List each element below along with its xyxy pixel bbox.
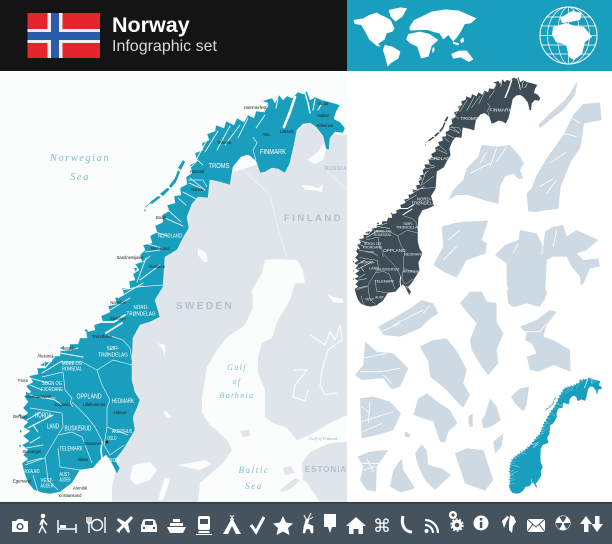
icon: up and down arrows xyxy=(580,516,603,532)
icon: ship xyxy=(167,519,186,533)
city labels: Florø xyxy=(18,378,28,383)
city labels: Bodø xyxy=(156,215,166,220)
map: dark Norway with regions: TROMS xyxy=(460,116,479,122)
icon: camera xyxy=(12,519,28,532)
map: dark Norway with regions: MØRE OG xyxy=(374,230,392,234)
map: dark Norway with regions: TRØNDELAG xyxy=(412,201,439,206)
map: dark Norway with regions: SØR- xyxy=(403,221,414,226)
city labels: Ålesund xyxy=(37,354,53,358)
map: dark Norway with regions xyxy=(352,77,540,307)
city labels: Hammerfest xyxy=(244,105,267,110)
city labels: Bergen xyxy=(13,414,27,419)
icon: telephone xyxy=(402,516,412,532)
region boundaries xyxy=(25,137,257,492)
header: world map panel xyxy=(347,0,612,71)
icon: home xyxy=(346,517,366,534)
sea labels: Norwegian xyxy=(49,153,110,164)
region labels: AKERSHUS xyxy=(112,429,132,435)
region labels: OPPLAND xyxy=(76,394,102,400)
panel: main map background xyxy=(0,71,347,503)
neighbouring land xyxy=(112,122,347,502)
city labels: Stavanger xyxy=(22,449,42,454)
icon: tent xyxy=(223,515,241,534)
map: Norway main shape xyxy=(18,91,345,494)
region labels: SØR- xyxy=(106,346,120,352)
icon: plate and cutlery xyxy=(87,517,105,533)
city labels: Kirkenes xyxy=(317,123,333,128)
sea labels: Bothnia xyxy=(219,391,255,400)
region labels: SOGN OG xyxy=(42,381,62,387)
icon: radiation xyxy=(556,516,570,530)
city labels: Skien xyxy=(78,457,89,462)
region labels: VEST- xyxy=(40,478,54,484)
city labels: Trondheim xyxy=(92,334,112,339)
map: dark Norway with regions: VEST- xyxy=(365,297,375,301)
region labels: AUST- xyxy=(60,472,71,478)
islands: Lofoten chain xyxy=(134,160,185,272)
city labels: Harstad xyxy=(190,169,205,174)
city labels: Hermansverk xyxy=(27,394,52,399)
subtitle: Infographic set xyxy=(112,38,218,55)
sea labels: Sea xyxy=(245,481,263,491)
region labels: TRØNDELAG xyxy=(98,352,128,358)
region labels: HORDA- xyxy=(35,412,53,420)
map: dark Norway with regions: OPPLAND xyxy=(383,248,406,253)
icon: car xyxy=(141,519,157,532)
icon: globe xyxy=(502,515,516,533)
icon: checkmark xyxy=(251,517,264,532)
region labels: NORD- xyxy=(134,305,149,311)
icon: Norwegian flag xyxy=(28,13,100,58)
icon: gears xyxy=(450,512,463,531)
city labels xyxy=(13,101,333,498)
icon: bed xyxy=(58,520,76,533)
title: Norway xyxy=(112,13,190,37)
map: dark Norway with regions: NORD- xyxy=(417,197,432,202)
icon: speech marker xyxy=(324,514,336,533)
map: dark Norway with regions: HORDA- xyxy=(360,260,376,264)
country labels: ESTONIA xyxy=(305,465,347,474)
map: dark Norway with regions: ØSTFOLD xyxy=(400,285,417,289)
map: dark Norway with regions: AKERSHUS xyxy=(403,270,422,274)
sea labels: Baltic xyxy=(238,465,270,475)
icon: star xyxy=(273,516,293,535)
world map xyxy=(353,7,477,67)
city labels: Lillehammer xyxy=(83,402,106,407)
region labels: OSLO xyxy=(108,436,117,442)
panel: right regions xyxy=(352,77,602,494)
icon: command key: ⌘ xyxy=(373,516,391,537)
region labels xyxy=(24,147,286,490)
country labels: RUSSIA xyxy=(325,166,347,172)
header: title panel xyxy=(0,0,347,71)
icon: plane xyxy=(116,516,133,533)
county silhouettes: upper group xyxy=(433,81,602,307)
icon: train xyxy=(196,516,212,535)
sea labels: Gulf of Finland xyxy=(309,436,338,441)
region labels: AGDER xyxy=(60,478,71,484)
region labels: FINMARK xyxy=(260,147,286,156)
city labels: Tromsø xyxy=(217,140,232,145)
map: dark Norway with regions: ROMSDAL xyxy=(374,233,392,237)
region labels: BUSKERUD xyxy=(64,426,92,432)
icon: walker xyxy=(39,514,47,533)
country labels: SWEDEN xyxy=(176,301,234,312)
region labels: MØRE OG xyxy=(62,361,82,367)
sea labels: of xyxy=(232,377,242,386)
city labels: Kristiansand xyxy=(58,493,82,498)
region labels: ØSTFOLD xyxy=(104,458,120,464)
region labels: TROMS xyxy=(208,161,230,170)
city labels: Molde xyxy=(64,346,76,351)
islands: west coast xyxy=(18,329,88,448)
city labels: Lakselv xyxy=(280,129,295,134)
map: small blue Norway xyxy=(508,377,602,494)
region labels: ROMSDAL xyxy=(62,366,82,372)
region labels: FJORDANE xyxy=(41,387,63,393)
globe xyxy=(540,7,597,64)
city labels: Narvik xyxy=(191,187,204,192)
city labels: Steinkjer xyxy=(110,316,127,321)
map: dark Norway with regions: SOGN OG xyxy=(364,242,382,246)
region labels: NORDLAND xyxy=(158,234,182,240)
city labels: Hamar xyxy=(114,410,127,415)
fjords xyxy=(26,93,322,468)
icon: envelope xyxy=(527,519,545,532)
sea labels: Sea xyxy=(70,172,90,183)
map: dark Norway with regions: FINMARK xyxy=(489,108,513,114)
city labels: Arendal xyxy=(73,486,87,490)
icon: information xyxy=(474,516,488,530)
icon bar xyxy=(0,502,612,544)
sea: gulf of bothnia and baltic xyxy=(198,259,347,502)
lakes and borders xyxy=(130,143,343,500)
city labels: Namsos xyxy=(110,300,126,305)
sea labels xyxy=(49,153,338,491)
map: dark Norway with regions: TRØNDELAG xyxy=(396,225,421,230)
map: dark Norway with regions: BUSKERUD xyxy=(377,266,400,271)
icon: deer xyxy=(303,513,313,533)
county silhouettes: lower group xyxy=(355,290,571,492)
region labels: TELEMARK xyxy=(60,446,83,452)
city labels: Alta xyxy=(262,132,270,137)
city labels: Egersund xyxy=(13,478,32,484)
country labels: FINLAND xyxy=(284,213,343,224)
city labels: Sandnessjøen xyxy=(117,255,144,260)
country labels xyxy=(176,166,347,474)
region labels: HEDMARK xyxy=(112,399,134,405)
map: dark Norway with regions: AUST- xyxy=(375,295,385,299)
map: dark Norway with regions: LAND xyxy=(369,267,379,271)
city labels: Mo i Rana xyxy=(150,246,170,251)
city labels: Mosjøen xyxy=(149,264,166,269)
city labels: Vadsø xyxy=(317,113,329,118)
map: dark Norway with regions: HEDMARK xyxy=(404,251,424,256)
map: dark Norway with regions: NORDLAND xyxy=(427,156,454,161)
icon: RSS xyxy=(424,520,438,533)
region labels: LAND xyxy=(47,424,59,430)
map: dark Norway with regions: TELEMARK xyxy=(374,279,395,283)
sea labels: Gulf xyxy=(227,363,247,372)
region labels: AGDER xyxy=(40,484,54,490)
region labels: ROGALAND xyxy=(24,469,40,475)
city labels: Vardø xyxy=(317,101,329,106)
city labels: Sogndal xyxy=(54,402,70,407)
region labels: TRØNDELAG xyxy=(126,312,156,318)
city labels: Drammen xyxy=(84,441,103,446)
map: dark Norway with regions: FJORDANE xyxy=(363,245,383,249)
